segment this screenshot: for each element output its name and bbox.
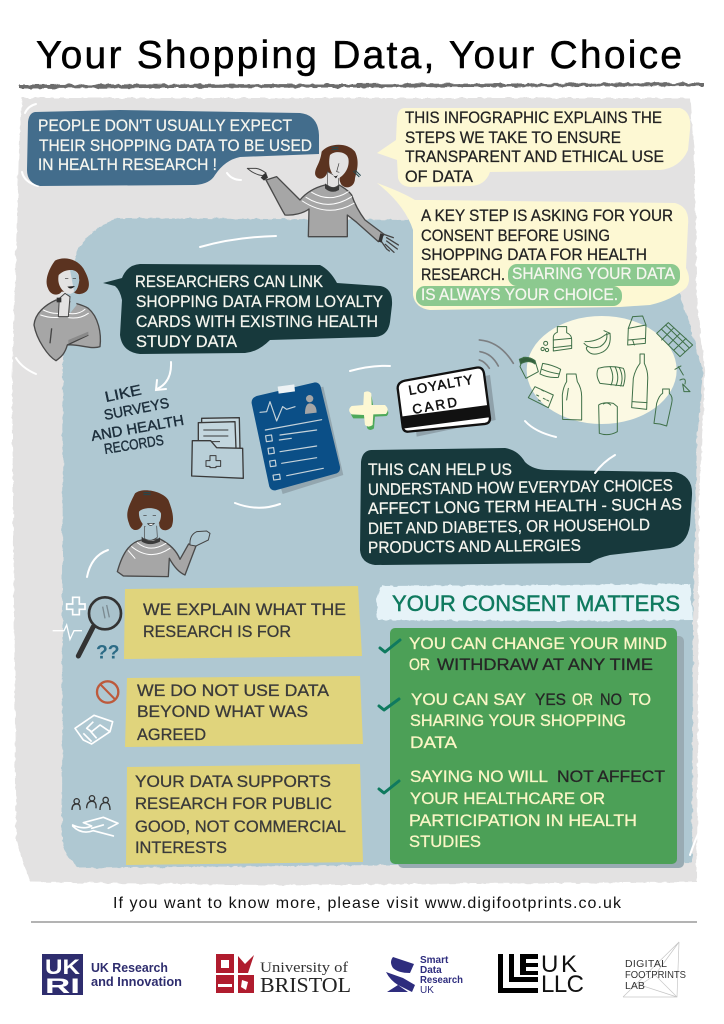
logo: University of Bristol (216, 954, 351, 997)
title: Your Shopping Data, Your Choice (36, 34, 682, 77)
card: do not use data beyond agreed (125, 676, 363, 747)
speech bubble: blue intro: PEOPLE DON'T USUALLY EXPECT (38, 117, 292, 135)
speech bubble: infographic explains (377, 108, 690, 187)
title underline (19, 83, 704, 88)
speech bubble: everyday choices (360, 448, 692, 565)
logo: University of Bristol: University of (260, 960, 348, 976)
logo: Smart Data Research UK: Research (420, 975, 463, 986)
icon: magnifying glass (53, 597, 121, 663)
note: like surveys and health records: AND HEALTH (90, 413, 185, 445)
icon: magnifying glass: ?? (96, 642, 120, 663)
speech bubble: everyday choices: THIS CAN HELP US (368, 461, 512, 479)
note: like surveys and health records: LIKE (104, 382, 143, 406)
speech bubble: key step consent: SHOPPING DATA FOR HEALTH (421, 246, 647, 264)
speech bubble: key step consent: CONSENT BEFORE USING (421, 227, 610, 245)
consent point two: OR (572, 690, 593, 709)
speech bubble: everyday choices: UNDERSTAND HOW EVERYDAY CHOICES (368, 477, 673, 499)
consent point three: SAYING NO WILL (410, 767, 548, 786)
logo: Smart Data Research UK: Data (420, 965, 442, 976)
speech bubble: everyday choices: PRODUCTS AND ALLERGIES (368, 537, 581, 557)
heading: your consent matters (376, 584, 693, 621)
speech bubble: key step consent: RESEARCH. (421, 266, 505, 284)
speech bubble: everyday choices: AFFECT LONG TERM HEALTH - SUCH AS (368, 496, 682, 518)
note: like surveys and health records: SURVEYS (103, 396, 171, 424)
speech bubble: blue intro (27, 110, 319, 186)
logo: UKRI: RI (45, 975, 80, 998)
consent point three: STUDIES (409, 832, 481, 851)
icon: people over open hand (72, 796, 118, 836)
card: public good: RESEARCH FOR PUBLIC (135, 794, 332, 813)
icon: medical record clipboard (252, 382, 343, 494)
speech bubble: key step consent: A KEY STEP IS ASKING FOR YOUR (421, 207, 673, 225)
card: do not use data beyond agreed: AGREED (137, 725, 206, 744)
logo: UKRI: UK Research (91, 960, 168, 975)
speech bubble: blue intro: IN HEALTH RESEARCH ! (38, 156, 217, 174)
speech bubble: everyday choices: DIET AND DIABETES, OR HOUSEHOLD (368, 516, 650, 538)
logo: UK LLC (498, 951, 584, 998)
consent point two: TO (629, 690, 651, 709)
logo: UK LLC: UK (541, 951, 577, 978)
consent point three: YOUR HEALTHCARE OR (410, 789, 605, 808)
icon: no sign and handshake (75, 681, 118, 744)
icon: loyalty card (398, 340, 513, 437)
logo: UK LLC: LLC (541, 971, 584, 998)
logo: Digital Footprints Lab: LAB (625, 980, 645, 992)
panel: consent points (390, 628, 684, 868)
consent point two: SHARING YOUR SHOPPING (410, 711, 626, 730)
icon: medical folder (192, 418, 243, 478)
consent point two: YOU CAN SAY (411, 690, 526, 709)
decorative swooshes (16, 104, 700, 855)
consent point one: YOU CAN CHANGE YOUR MIND (409, 634, 667, 653)
logo: UKRI: UK (45, 956, 80, 979)
logo: UKRI: and Innovation (91, 974, 182, 989)
logo: Smart Data Research UK (386, 955, 463, 996)
logo: Smart Data Research UK: UK (420, 985, 434, 996)
consent point two: NO (600, 690, 622, 709)
card: public good: YOUR DATA SUPPORTS (135, 772, 331, 791)
consent point one: OR (409, 655, 430, 674)
speech bubble: infographic explains: OF DATA (405, 168, 473, 186)
speech bubble: infographic explains: TRANSPARENT AND ETHICAL USE (405, 148, 664, 166)
consent point one (409, 634, 667, 674)
figure: woman waving (117, 490, 210, 577)
card: public good: GOOD, NOT COMMERCIAL (135, 817, 346, 836)
speech bubble: researchers can link: CARDS WITH EXISTING HEALTH (136, 313, 378, 331)
speech bubble: researchers can link: RESEARCHERS CAN LINK (135, 273, 323, 291)
card: public good (126, 764, 363, 865)
logo: Digital Footprints Lab (623, 942, 686, 997)
consent point one: WITHDRAW AT ANY TIME (437, 655, 653, 674)
panel: grey background (12, 98, 705, 885)
panel: blue background (62, 218, 703, 868)
icon: plus sign (349, 391, 388, 430)
speech bubble: researchers can link: STUDY DATA (136, 333, 237, 351)
footer link text: If you want to know more, please visit www.digifootprints.co.uk (113, 895, 622, 912)
consent point two (410, 690, 651, 752)
speech bubble: blue intro: THEIR SHOPPING DATA TO BE USED (39, 137, 312, 155)
logo: Smart Data Research UK: Smart (420, 955, 449, 966)
logo: Digital Footprints Lab: FOOTPRINTS (625, 969, 686, 981)
icon: check marks (379, 640, 400, 793)
card: do not use data beyond agreed: BEYOND WHAT WAS (137, 702, 308, 721)
speech bubble: key step consent (377, 183, 689, 310)
footer divider (31, 921, 697, 923)
speech bubble: key step consent: SHARING YOUR DATA (512, 265, 675, 283)
card: explain research: RESEARCH IS FOR (143, 622, 291, 641)
card: public good: INTERESTS (135, 838, 227, 857)
note: like surveys and health records (90, 382, 185, 458)
logo: University of Bristol: BRISTOL (260, 973, 351, 997)
figure: thinking woman (34, 258, 100, 361)
speech bubble: researchers can link: SHOPPING DATA FROM LOYALTY (136, 293, 383, 311)
card: explain research (124, 586, 362, 659)
consent point two: YES (535, 690, 566, 709)
figure: presenter woman with arms out (247, 145, 398, 252)
speech bubble: researchers can link (103, 264, 392, 354)
logo: UKRI (42, 954, 182, 998)
swoosh beside waving figure (87, 550, 108, 577)
heading: your consent matters: YOUR CONSENT MATTERS (392, 591, 680, 616)
note: like surveys and health records: RECORDS (103, 433, 165, 458)
swoosh on bubble (595, 455, 615, 473)
illustration: groceries (519, 316, 693, 435)
speech bubble: infographic explains: STEPS WE TAKE TO ENSURE (405, 129, 621, 147)
speech bubble: infographic explains: THIS INFOGRAPHIC EXPLAINS THE (405, 109, 662, 127)
consent point three (409, 767, 665, 851)
consent point three: NOT AFFECT (557, 767, 665, 786)
consent point three: PARTICIPATION IN HEALTH (409, 811, 637, 830)
icon: loyalty card: LOYALTY (407, 372, 474, 398)
logo: Digital Footprints Lab: DIGITAL (625, 958, 667, 970)
icon: loyalty card: CARD (411, 394, 458, 417)
card: do not use data beyond agreed: WE DO NOT USE DATA (137, 681, 330, 700)
card: explain research: WE EXPLAIN WHAT THE (143, 600, 346, 619)
speech bubble: key step consent: IS ALWAYS YOUR CHOICE. (421, 286, 618, 304)
consent point two: DATA (410, 733, 458, 752)
arrow: to surveys note (156, 362, 171, 390)
